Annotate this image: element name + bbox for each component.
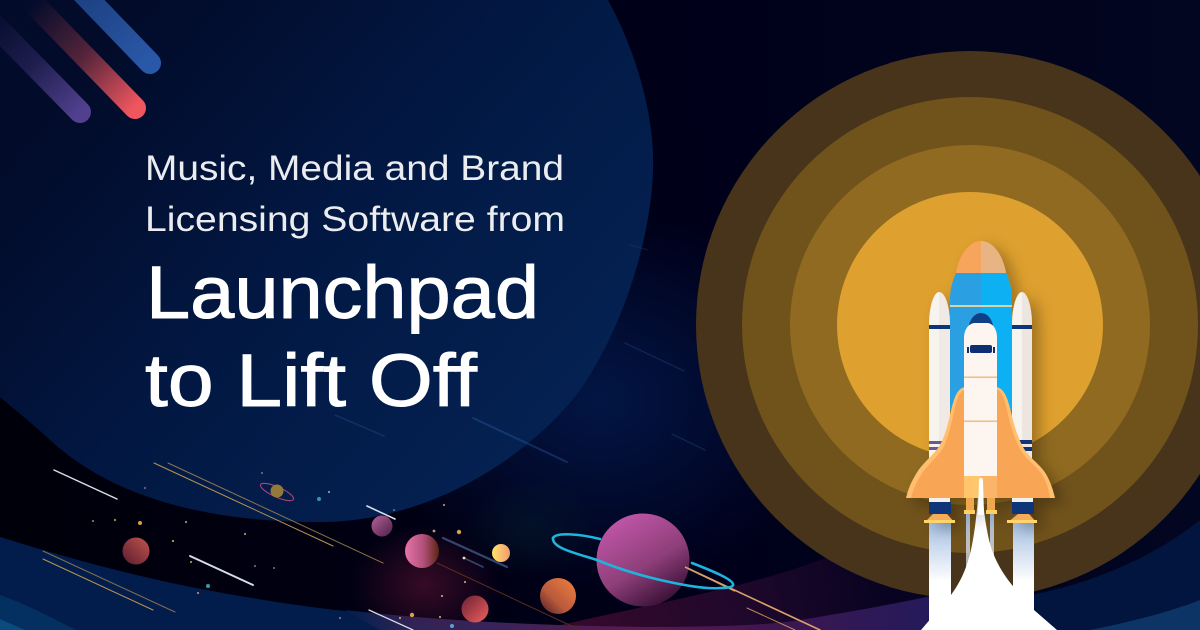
orbiter body <box>964 323 997 476</box>
bottom wave bands <box>0 515 1200 630</box>
ring: front half <box>553 538 733 588</box>
band: right navy <box>1000 520 1200 630</box>
green glow near centre <box>460 480 600 580</box>
star dots <box>92 472 466 628</box>
planet: red bottom <box>462 596 488 622</box>
band: maroon haze <box>540 515 960 630</box>
booster nozzles <box>924 498 1037 523</box>
gold trail over planet edge <box>685 567 735 591</box>
meteors and gold trails <box>43 463 820 630</box>
streak: purple <box>0 10 80 112</box>
flame: thin right <box>990 513 994 568</box>
flame: left booster <box>929 523 951 630</box>
band: left lighter wave <box>0 595 76 630</box>
blue fuel tank <box>950 273 1012 410</box>
planet: orange <box>540 578 576 614</box>
ring: outer <box>696 51 1200 599</box>
planet: yellow <box>492 544 510 562</box>
subtitle line two: Licensing Software from <box>145 200 565 239</box>
planet: red left <box>122 538 150 564</box>
top-left diagonal streaks <box>0 0 150 112</box>
flame: thin left <box>966 513 970 568</box>
orbiter tail and engines <box>964 476 997 514</box>
cockpit cap <box>969 313 993 325</box>
rocket exhaust <box>921 478 1057 630</box>
nose cone <box>956 241 1006 273</box>
ring: third <box>742 97 1198 553</box>
right booster <box>1012 292 1032 500</box>
band: pink purple wave <box>345 590 960 630</box>
headline text <box>145 149 565 422</box>
subtitle line one: Music, Media and Brand <box>145 149 564 188</box>
ring: back half <box>553 534 733 585</box>
concentric sun rings <box>696 51 1200 599</box>
large navy planet <box>0 0 653 522</box>
title line one: Launchpad <box>146 251 539 334</box>
purple sphere <box>596 514 690 606</box>
planet: small ringed <box>259 480 295 504</box>
band: left blue wave <box>0 537 660 630</box>
gold trails <box>43 463 820 630</box>
orange wings <box>906 387 1055 498</box>
dim blue meteors <box>443 538 507 567</box>
faint streaks on planet <box>335 245 705 462</box>
ring: second <box>790 145 1150 505</box>
flame: central plume <box>921 478 1057 630</box>
streak: blue <box>70 0 150 63</box>
space shuttle <box>906 241 1055 523</box>
navy haze behind planet <box>370 210 830 590</box>
planet: large pink <box>405 534 439 568</box>
planet: ringed purple <box>553 514 735 606</box>
band: lightest corner <box>0 619 25 630</box>
planet: small pink <box>372 516 392 536</box>
flame: right booster <box>1013 523 1034 630</box>
ring: gold disc <box>837 192 1103 458</box>
band: right lighter blue <box>1090 600 1200 630</box>
white meteors <box>54 470 413 630</box>
central flame tip over orbiter <box>978 478 984 515</box>
pink glow behind planets <box>350 525 500 630</box>
left booster <box>929 292 950 500</box>
streak: red <box>30 0 135 108</box>
title line two: to Lift Off <box>145 339 477 422</box>
